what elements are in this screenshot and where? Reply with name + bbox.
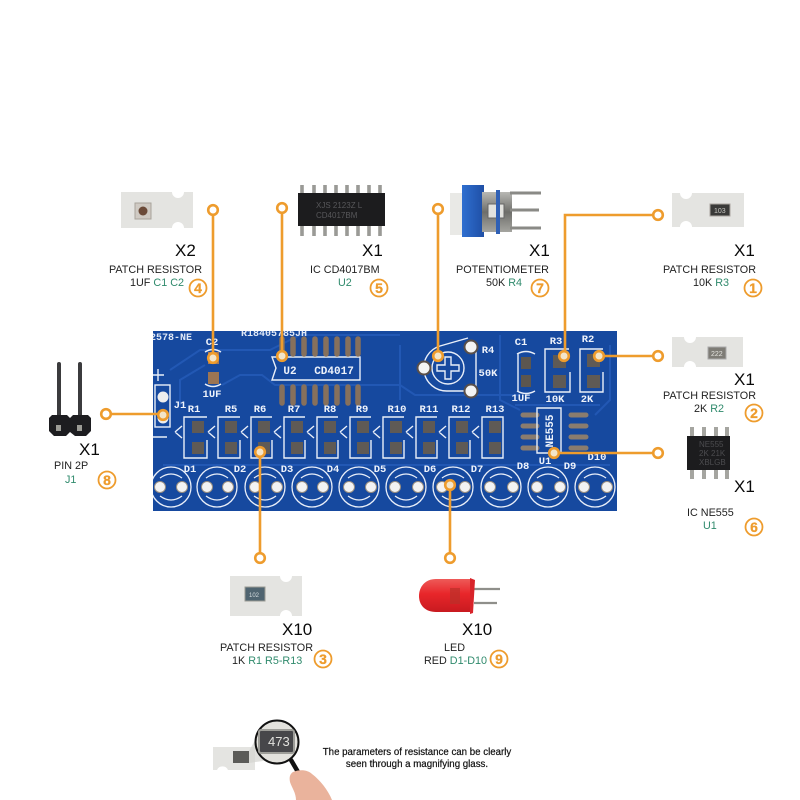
caption: part 4: X2 [175,241,196,260]
caption: part 2: 2K R2 [694,403,724,415]
footprint: CD4017 IC U2: CD4017 [314,366,354,378]
caption: part 8: J1 [65,474,76,486]
part: red LED [419,578,500,614]
part: NE555 chip: XBLGB [699,458,726,467]
footprint: LED row: D7 [471,464,483,476]
footprint: C1 capacitor [512,337,535,405]
part: 1K resistor on tape [230,576,302,616]
part: CD4017 chip: CD4017BM [316,211,358,220]
caption: part 3: X10 [282,620,312,639]
footprint: R3 and R2: 2K [581,394,594,406]
panel: blue circuit board [150,329,617,511]
part: 2 pin header [49,364,91,436]
caption: part 4: 1UF C1 C2 [130,277,184,289]
footprint: J1 header [152,369,186,437]
note text: The parameters of resistance can be clearly [323,747,511,758]
leader line: J1 [101,409,168,420]
caption: part 6 [687,477,762,536]
footprint: R3 and R2: R2 [582,334,594,346]
text: top edge silkscreen: 2578-NE [150,333,192,344]
part: 10K resistor on tape [672,193,744,227]
caption: part 6: IC NE555 [687,507,734,519]
caption: part 7: POTENTIOMETER [456,264,549,276]
part: NE555 chip: 2K 21K [699,449,726,458]
leader line: U2 [277,203,287,361]
caption: part 4: PATCH RESISTOR [109,264,202,276]
part: 1K resistor on tape: 102 [249,593,260,599]
part: blue potentiometer [450,185,541,237]
footprint: resistor row: R8 [324,404,336,416]
footprint: C2 capacitor: 1UF [203,389,221,401]
footprint: resistor row: R9 [356,404,368,416]
footprint: LED row: D1 [184,464,196,476]
caption: part 9: LED [444,642,465,654]
footprint: J1 header: J1 [174,400,186,412]
footprint: resistor row [175,404,504,458]
footprint: resistor row: R12 [452,404,470,416]
caption: part 1: X1 [734,241,755,260]
footprint: R3 and R2 [545,334,603,406]
leader line: U1 [549,448,663,458]
caption: part 8: PIN 2P [54,460,88,472]
caption: part 8: 8 [103,472,111,488]
footprint: LED row: D9 [564,461,576,473]
caption: part 4: 4 [194,280,202,296]
caption: part 9: 9 [495,651,503,667]
caption: part 3: 3 [319,651,327,667]
footprint: R3 and R2: R3 [550,336,562,348]
caption: part 4 [109,241,206,296]
footprint: LED row: D3 [281,464,293,476]
part: NE555 chip: NE555 [699,440,724,449]
footprint: LED row: D5 [374,464,386,476]
caption: part 3: PATCH RESISTOR [220,642,313,654]
footprint: LED row: D10 [588,452,606,464]
part: 1UF patch capacitor on tape [121,192,193,228]
caption: part 5 [310,241,388,296]
footprint: LED row [151,452,615,507]
footprint: C1 capacitor: 1UF [512,393,530,405]
caption: part 2 [663,370,762,422]
caption: part 7: 50K R4 [486,277,522,289]
caption: part 1 [663,241,762,296]
note text [323,747,511,770]
part: 10K resistor on tape: 103 [714,208,726,215]
leader line: R6 [255,447,265,563]
footprint: LED row: D2 [234,464,246,476]
leader line: R4 [433,204,443,361]
caption: part 2: PATCH RESISTOR [663,390,756,402]
caption: part 2: X1 [734,370,755,389]
caption: part 5: 5 [375,280,383,296]
caption: part 5: X1 [362,241,383,260]
caption: part 6: 6 [750,519,758,535]
footprint: resistor row: R11 [420,404,438,416]
footprint: resistor row: R6 [254,404,266,416]
footprint: CD4017 IC U2 [272,339,360,403]
part: 2K resistor on tape: 222 [711,351,723,358]
caption: part 1: 1 [749,280,757,296]
footprint: CD4017 IC U2: U2 [283,366,297,378]
caption: part 7: X1 [529,241,550,260]
footprint: resistor row: R5 [225,404,237,416]
note text: seen through a magnifying glass. [346,759,488,770]
caption: part 3: 1K R1 R5-R13 [232,655,302,667]
caption: part 6: U1 [703,520,717,532]
caption: part 7 [456,241,550,296]
part: CD4017 chip [298,185,385,236]
caption: part 2: 2 [750,405,758,421]
footprint: LED row: D6 [424,464,436,476]
caption: part 7: 7 [536,280,544,296]
caption: part 9: RED D1-D10 [424,655,487,667]
leader line: R2 [594,351,663,361]
footprint: NE555 U1: NE555 [545,414,557,448]
footprint: C2 capacitor: C2 [206,337,218,349]
illustration: magnifying glass over resistor: 473 [268,734,290,749]
board copper traces [163,335,610,465]
part: NE555 chip [687,427,730,479]
caption: part 5: U2 [338,277,352,289]
panel: blue circuit board: R18405785JH [241,329,307,340]
caption: part 8 [54,440,116,488]
leader line: C2 [208,205,218,363]
caption: part 5: IC CD4017BM [310,264,380,276]
caption: part 1: PATCH RESISTOR [663,264,756,276]
caption: part 3 [220,620,332,668]
caption: part 9 [424,620,508,668]
footprint: resistor row: R7 [288,404,300,416]
footprint: LED row: D4 [327,464,339,476]
footprint: R3 and R2: 10K [546,394,565,406]
footprint: R4 potentiometer: 50K [479,368,498,380]
part: 2K resistor on tape [672,337,743,367]
footprint: NE555 U1 [523,408,586,453]
footprint: LED row: D8 [517,461,529,473]
caption: part 1: 10K R3 [693,277,729,289]
footprint: R4 potentiometer [418,338,498,398]
footprint: C2 capacitor [203,338,222,397]
part: CD4017 chip: XJS 2123Z L [316,201,363,210]
footprint: R4 potentiometer: R4 [482,345,494,357]
footprint: resistor row: R10 [388,404,406,416]
footprint: resistor row: R13 [486,404,504,416]
footprint: LED row: U1 [539,456,551,468]
leader line: D6 [445,480,455,563]
leader line: R3 [559,210,663,361]
footprint: resistor row: R1 [188,404,200,416]
caption: part 8: X1 [79,440,100,459]
caption: part 6: X1 [734,477,755,496]
caption: part 9: X10 [462,620,492,639]
illustration: magnifying glass over resistor [213,720,332,800]
footprint: C1 capacitor: C1 [515,337,527,349]
